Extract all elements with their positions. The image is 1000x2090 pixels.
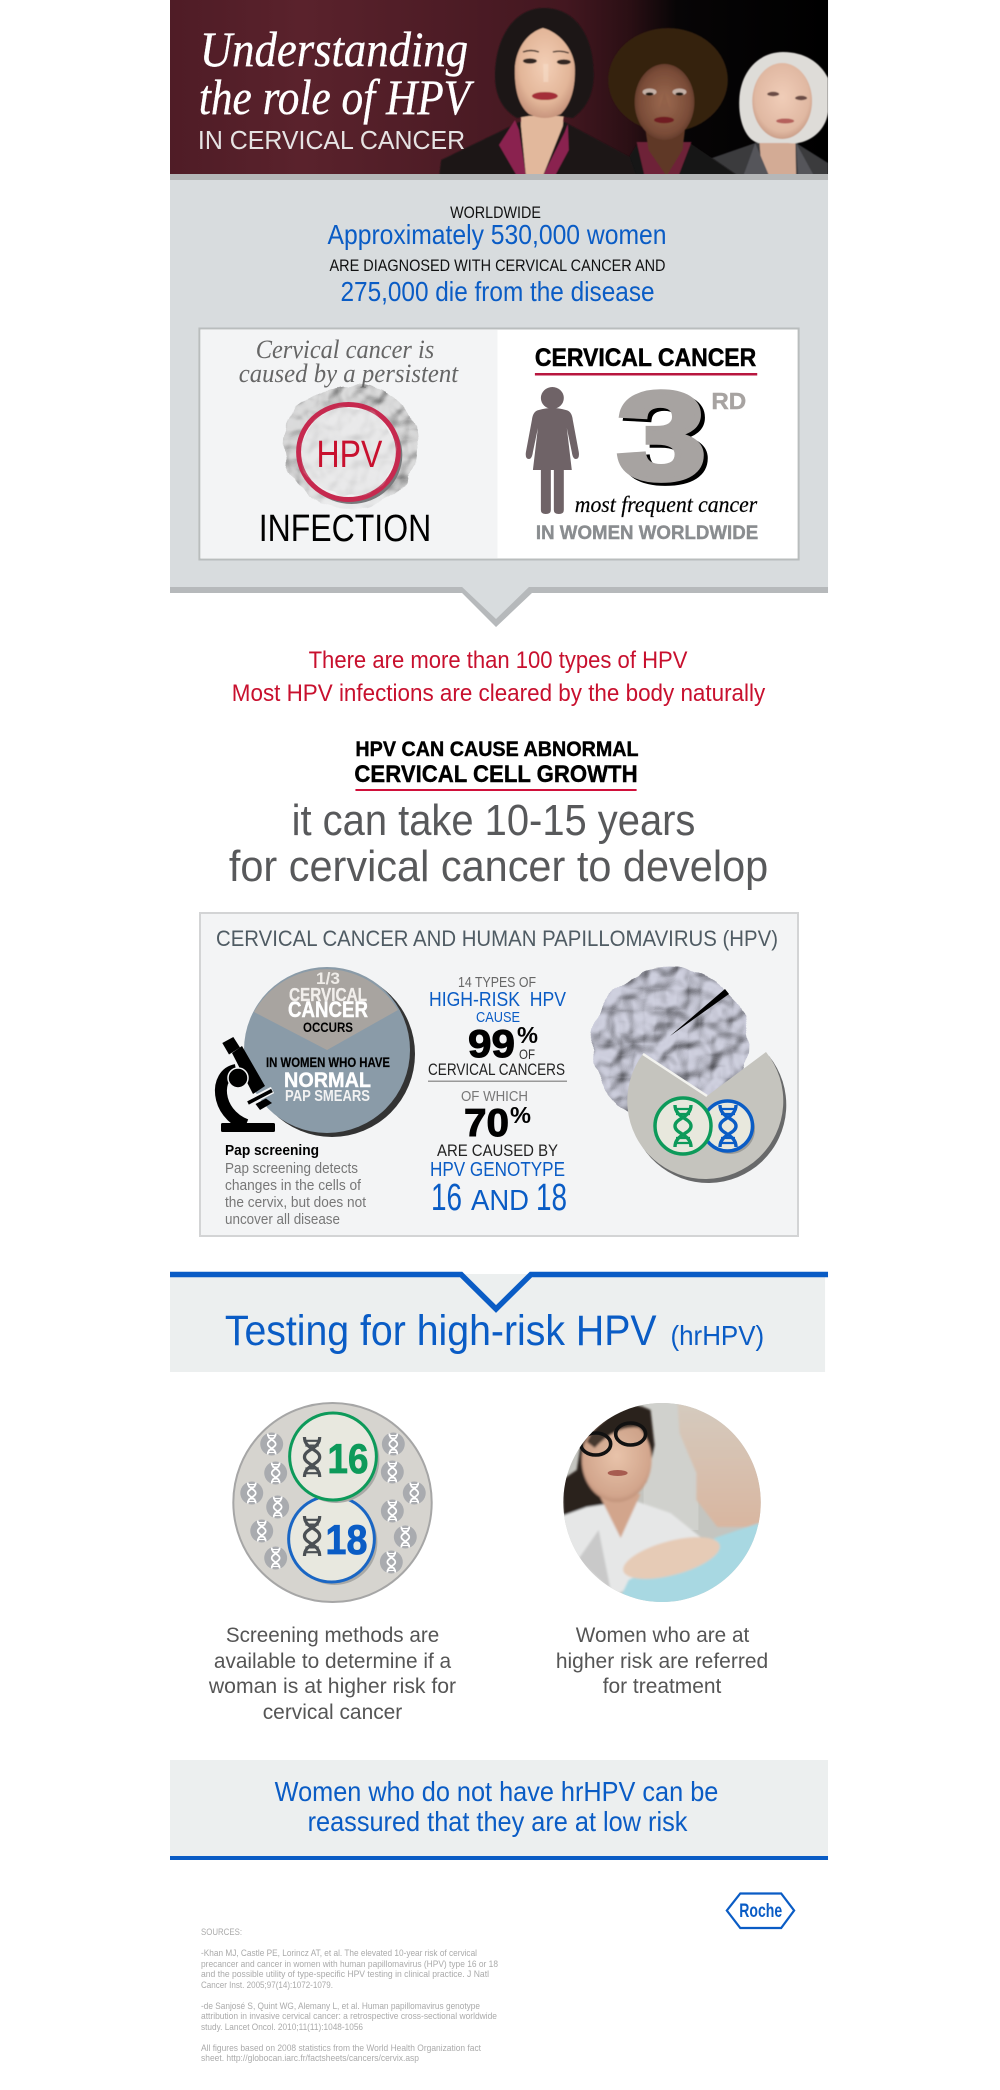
pie circle: one third occurs with normal pap smears: PAP SMEARS: [285, 1088, 370, 1105]
title: Understanding: [200, 22, 468, 77]
genotype 16: 16: [328, 1435, 368, 1482]
centre statistics column: HIGH-RISK HPV: [429, 989, 567, 1011]
logo: Roche: Roche: [739, 1901, 782, 1922]
centre statistics column: OF: [519, 1046, 535, 1062]
pie circle: one third occurs with normal pap smears: [244, 967, 415, 1137]
woman 2: [608, 28, 738, 176]
right half: third most frequent cancer: [526, 344, 758, 544]
sources: sheet. http://globocan.iarc.fr/factsheets/cancers/cervix.asp: [201, 2053, 419, 2064]
icon: HPV virus with red ring: HPV: [317, 434, 383, 476]
woman 3: [704, 52, 828, 176]
centre statistics column: ARE CAUSED BY: [437, 1141, 558, 1160]
large grey statement: it can take 10-15 years: [292, 796, 695, 845]
centre statistics column: [428, 974, 567, 1219]
caption: screening methods: available to determine if a: [214, 1649, 451, 1673]
icon: genotype 16 and 18 disc: [233, 1403, 432, 1602]
photo: doctor with patient: [559, 1400, 764, 1606]
large grey statement: for cervical cancer to develop: [229, 842, 768, 891]
left half: persistent HPV infection: [239, 335, 459, 550]
left half: persistent HPV infection: Cervical cancer is: [256, 335, 434, 364]
panel heading: CERVICAL CANCER AND HUMAN PAPILLOMAVIRUS (HPV): [216, 926, 778, 951]
left half: persistent HPV infection: INFECTION: [259, 508, 431, 550]
centre statistics column: CAUSE: [476, 1009, 520, 1026]
sources: All figures based on 2008 statistics from the World Health Organization fact: [201, 2043, 481, 2054]
text: pap screening: [225, 1143, 366, 1228]
centre statistics column: 14 TYPES OF: [458, 974, 536, 991]
worldwide statistics text: [328, 204, 667, 307]
section header: testing for high-risk HPV: (hrHPV): [670, 1320, 764, 1351]
sources: and the possible utility of type-specific HPV testing in clinical practice. J Natl: [201, 1969, 489, 1980]
icon: HPV virus with genotype cutaway: [592, 967, 786, 1183]
centre statistics column: 99: [468, 1023, 515, 1066]
icon: microscope: [221, 1037, 275, 1132]
grey statistics panel with pointer: [170, 174, 828, 627]
large ordinal 3rd: 3: [617, 367, 706, 506]
panel: cervical cancer and HPV: [200, 913, 798, 1236]
heading: abnormal cell growth: HPV CAN CAUSE ABNORMAL: [355, 738, 639, 761]
card: cause and ranking: [199, 328, 799, 560]
text: pap screening: Pap screening detects: [225, 1161, 358, 1177]
title: [198, 22, 475, 155]
large ordinal 3rd: [617, 367, 746, 509]
large grey statement: [229, 796, 768, 891]
large ordinal 3rd: RD: [711, 388, 746, 414]
text: pap screening: uncover all disease: [225, 1212, 340, 1228]
right half: third most frequent cancer: IN WOMEN WORLDWIDE: [536, 523, 758, 544]
pie circle: one third occurs with normal pap smears: OCCURS: [303, 1019, 353, 1035]
genotype 16: [290, 1413, 379, 1503]
sources: precancer and cancer in women with human papillomavirus (HPV) type 16 or 18: [201, 1959, 498, 1970]
worldwide statistics text: 275,000 die from the disease: [340, 276, 655, 307]
pie circle: one third occurs with normal pap smears: NORMAL: [284, 1069, 371, 1092]
worldwide statistics text: WORLDWIDE: [450, 204, 541, 222]
genotype 18: [289, 1496, 377, 1585]
woman 1: [439, 8, 636, 176]
centre statistics column: %: [517, 1022, 538, 1048]
text: pap screening: the cervix, but does not: [225, 1195, 366, 1211]
pie circle: one third occurs with normal pap smears: IN WOMEN WHO HAVE: [266, 1054, 390, 1070]
sources: -Khan MJ, Castle PE, Lorincz AT, et al. The elevated 10-year risk of cervical: [201, 1948, 477, 1959]
red statements: [232, 647, 765, 707]
red statements: There are more than 100 types of HPV: [309, 647, 687, 674]
text: pap screening: changes in the cells of: [225, 1178, 362, 1194]
banner: [170, 0, 828, 176]
section header: testing for high-risk HPV: [170, 1274, 828, 1372]
caption: referred for treatment: Women who are at: [576, 1623, 749, 1647]
heading: abnormal cell growth: [354, 738, 639, 791]
sources: -de Sanjosé S, Quint WG, Alemany L, et al. Human papillomavirus genotype: [201, 2001, 480, 2012]
genotype 18: 18: [326, 1516, 367, 1563]
pie circle: one third occurs with normal pap smears: 1/3: [316, 969, 340, 988]
worldwide statistics text: ARE DIAGNOSED WITH CERVICAL CANCER AND: [330, 257, 666, 275]
caption: screening methods: woman is at higher risk for: [208, 1674, 456, 1698]
centre statistics column: 70: [464, 1102, 509, 1145]
centre statistics column: HPV GENOTYPE: [430, 1159, 565, 1181]
text: pap screening: Pap screening: [225, 1143, 319, 1159]
sources: SOURCES:: [201, 1927, 242, 1938]
banner photo: three women: [439, 8, 828, 176]
icon: woman figure: [526, 387, 579, 514]
callout: low risk reassurance: reassured that they are at low risk: [308, 1806, 688, 1837]
sources: [201, 1927, 498, 2064]
centre statistics column: 16: [431, 1177, 462, 1219]
large ordinal 3rd: 3: [621, 370, 710, 509]
section header: testing for high-risk HPV: Testing for high-risk HPV: [225, 1307, 657, 1355]
centre statistics column: CERVICAL CANCERS: [428, 1060, 565, 1079]
title: the role of HPV: [199, 70, 475, 125]
caption: referred for treatment: higher risk are referred: [556, 1649, 768, 1673]
pie circle: one third occurs with normal pap smears: CANCER: [288, 997, 368, 1022]
left half: persistent HPV infection: caused by a persistent: [239, 359, 459, 388]
centre statistics column: AND: [471, 1185, 529, 1217]
centre statistics column: %: [510, 1102, 531, 1128]
callout: low risk reassurance: [170, 1760, 828, 1860]
worldwide statistics text: Approximately 530,000 women: [328, 219, 667, 250]
icon: HPV virus with red ring: [275, 384, 429, 514]
sources: study. Lancet Oncol. 2010;11(11):1048-1056: [201, 2022, 363, 2033]
caption: referred for treatment: for treatment: [603, 1674, 721, 1698]
caption: screening methods: Screening methods are: [226, 1623, 439, 1647]
caption: screening methods: [208, 1623, 456, 1724]
sources: Cancer Inst. 2005;97(14):1072-1079.: [201, 1980, 333, 1991]
heading: abnormal cell growth: CERVICAL CELL GROWTH: [354, 761, 638, 788]
right half: third most frequent cancer: CERVICAL CANCER: [535, 344, 756, 372]
logo: Roche: [727, 1894, 794, 1928]
pie circle: one third occurs with normal pap smears: CERVICAL: [289, 985, 367, 1005]
red statements: Most HPV infections are cleared by the body naturally: [232, 680, 765, 707]
caption: screening methods: cervical cancer: [263, 1700, 402, 1724]
centre statistics column: 18: [536, 1177, 567, 1219]
small DNA tokens: [240, 1432, 426, 1574]
sources: attribution in invasive cervical cancer: a retrospective cross-sectional worldwide: [201, 2011, 497, 2022]
caption: referred for treatment: [556, 1623, 768, 1698]
callout: low risk reassurance: Women who do not have hrHPV can be: [275, 1776, 718, 1807]
centre statistics column: OF WHICH: [461, 1088, 528, 1105]
right half: third most frequent cancer: most frequent cancer: [575, 492, 757, 517]
title: IN CERVICAL CANCER: [198, 125, 465, 155]
